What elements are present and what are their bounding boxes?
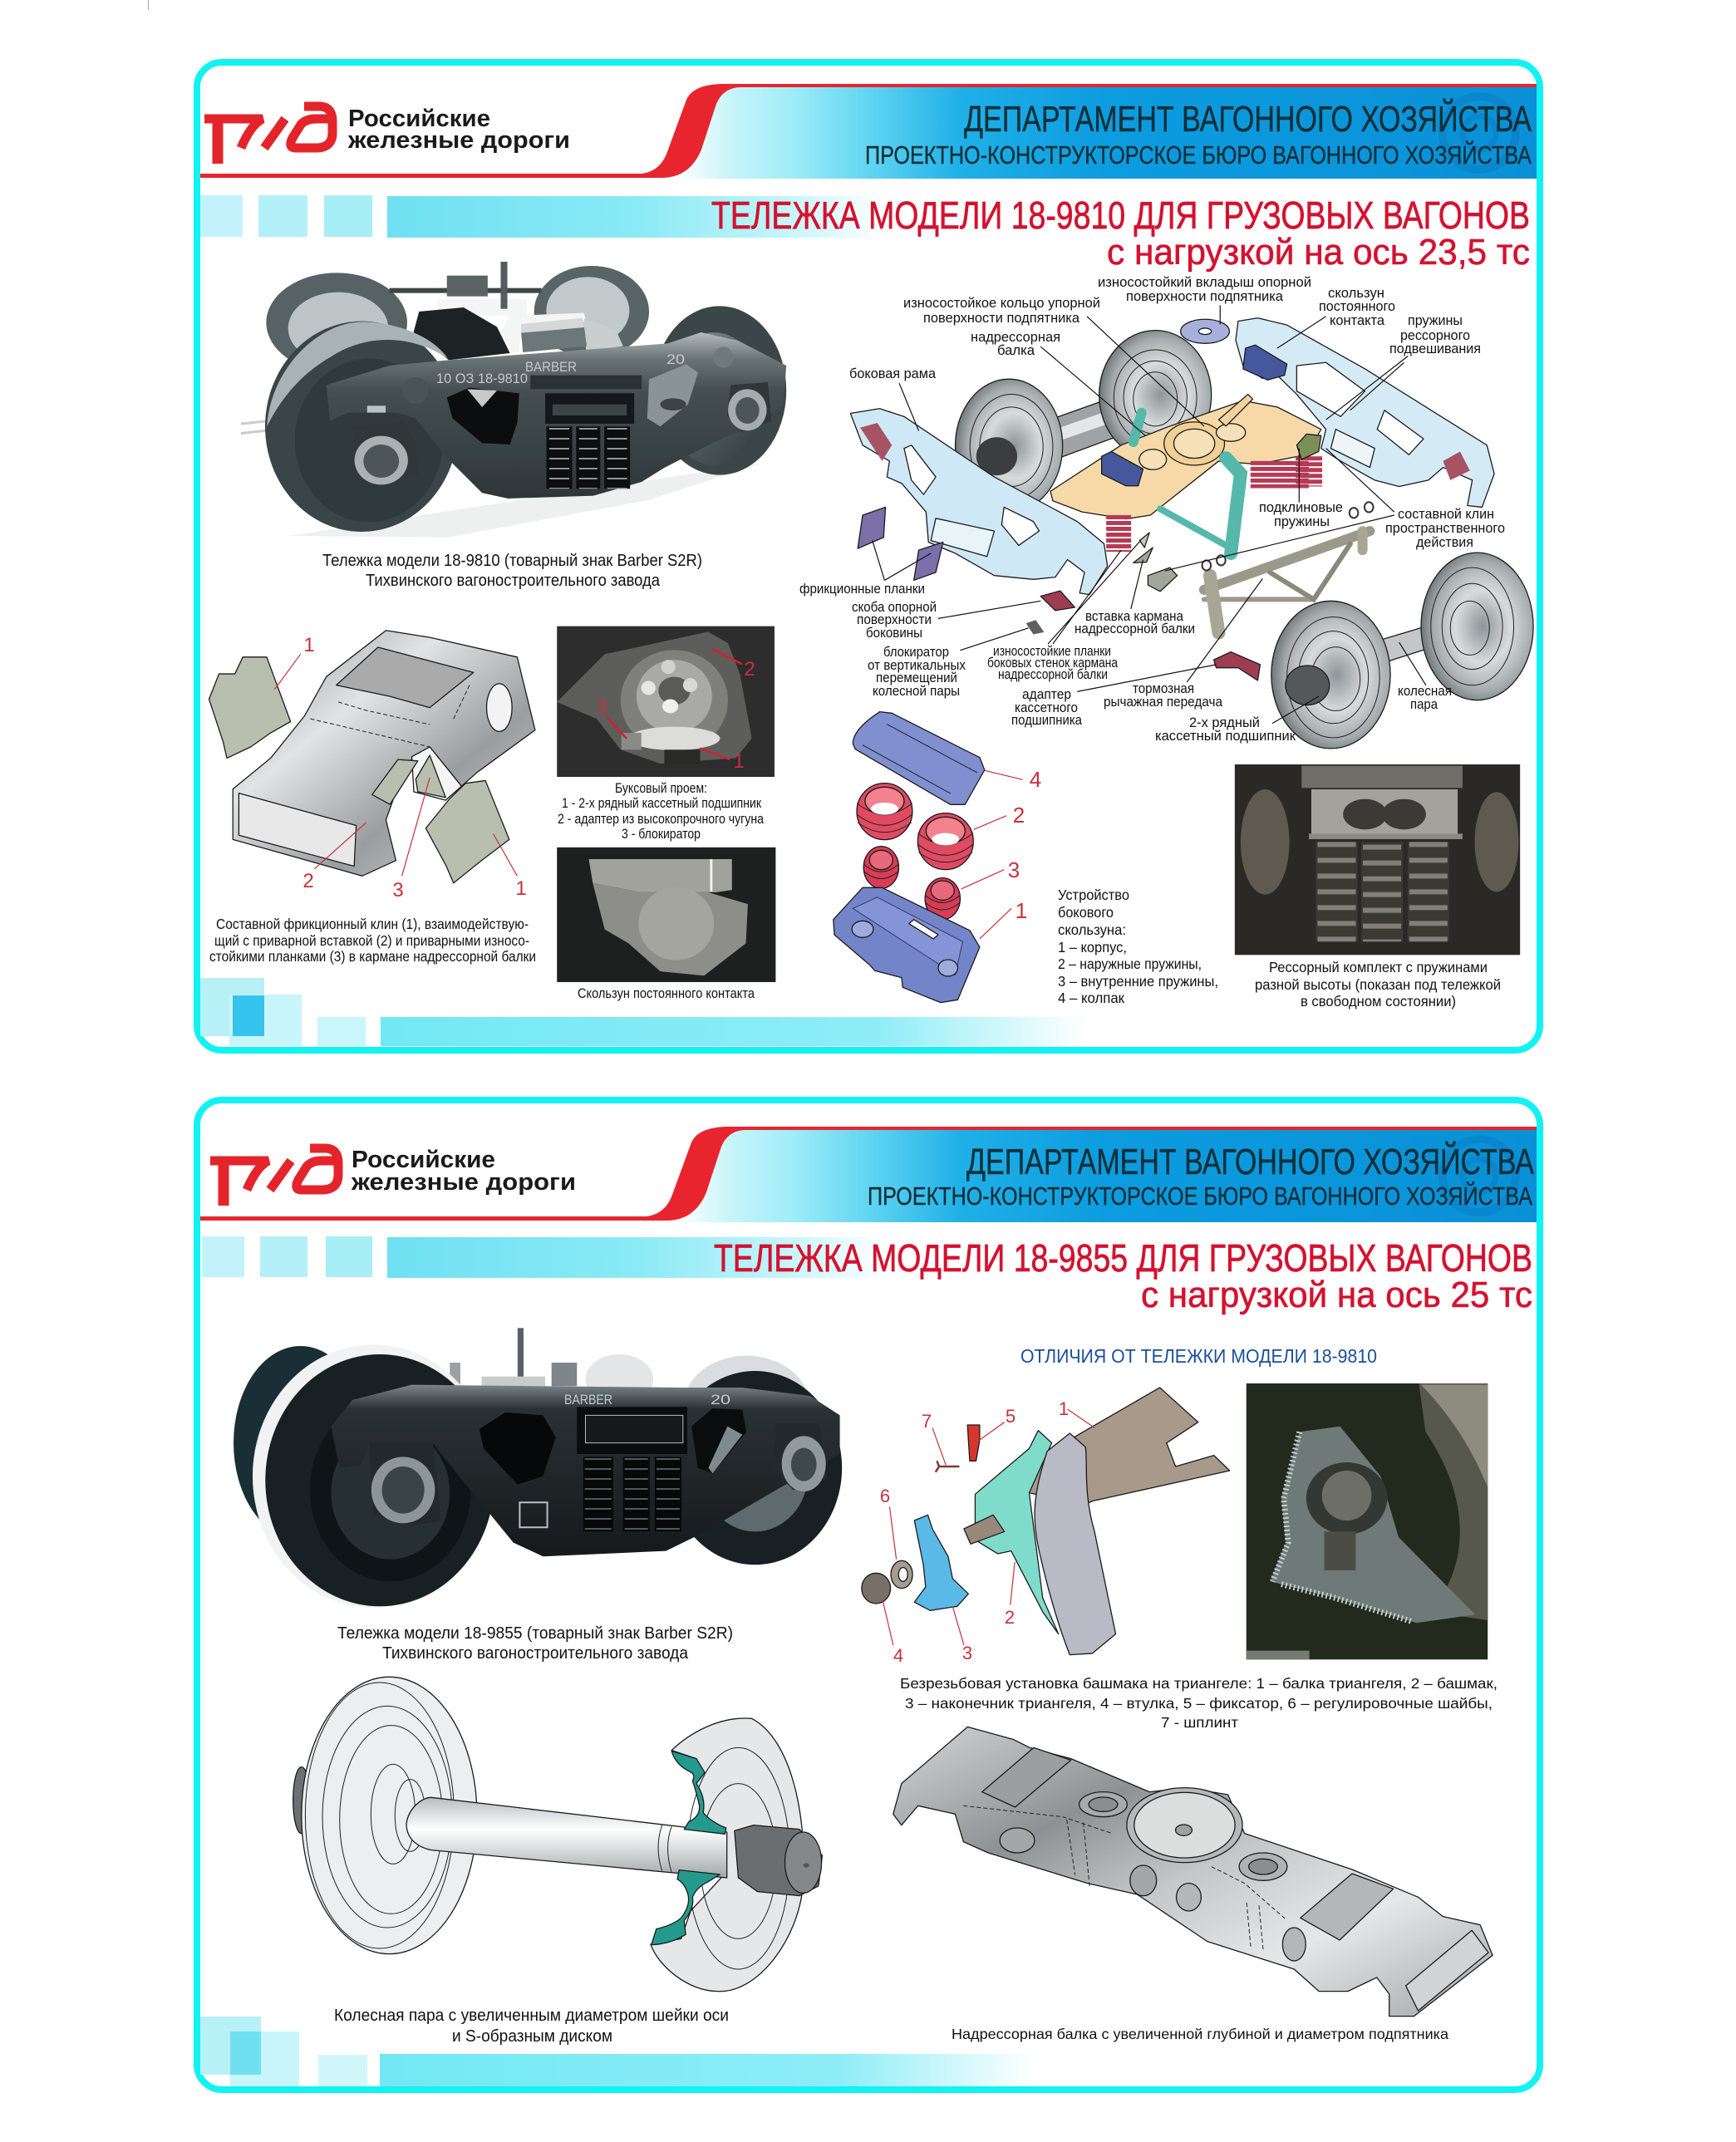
numbers on axle box photo: 3: [596, 696, 607, 719]
front wheelset: [1271, 553, 1533, 749]
shoe part numbers: 7: [922, 1411, 932, 1432]
exploded diagram labels: поверхности: [857, 612, 932, 627]
caption: side bearing parts: 2 – наружные пружины,: [1058, 956, 1202, 972]
exploded diagram labels: контакта: [1330, 313, 1385, 328]
cap: [853, 712, 985, 804]
outer spring left: [857, 784, 912, 840]
exploded diagram labels: тормозная: [1133, 681, 1194, 696]
title second line: с нагрузкой на ось 23,5 тс: [1107, 232, 1530, 273]
photo: axle box opening: [557, 626, 775, 777]
red leaders: [883, 1409, 1094, 1645]
photo: spring set: [1235, 764, 1520, 955]
leader lines: [873, 305, 1426, 724]
exploded diagram labels: надрессорной балки: [998, 667, 1108, 682]
caption: side bearing parts: 4 – колпак: [1058, 990, 1124, 1006]
side bearing numbers: 1: [1016, 898, 1027, 923]
exploded diagram labels: подклиновые: [1259, 500, 1343, 515]
caption: friction wedge: щий с приварной вставкой (2) и приварными износо-: [214, 932, 529, 949]
seams: [311, 685, 470, 747]
photo: bogie 18-9855: [234, 1328, 842, 1608]
RZD logo mark: [210, 1148, 338, 1206]
caption: axle box opening: 2 - адаптер из высокопрочного чугуна: [558, 812, 765, 827]
exploded diagram labels: балка: [997, 343, 1035, 358]
header banner blue band: [677, 1128, 1537, 1222]
caption: side bearing parts: бокового: [1058, 904, 1114, 921]
outer spring right: [917, 813, 973, 870]
exploded diagram labels: износостойкое кольцо упорной: [903, 296, 1100, 311]
logo wordmark: железные дороги: [351, 1169, 576, 1196]
white area left of swoosh: [200, 83, 726, 174]
washer: [891, 1560, 912, 1589]
bolster end: [233, 631, 535, 876]
caption: axle box opening: 3 - блокиратор: [622, 827, 701, 842]
photo: bogie 18-9810: [241, 262, 786, 538]
exploded diagram labels: боковых стенок кармана: [987, 656, 1119, 671]
base body: [834, 887, 980, 1003]
exploded diagram labels: адаптер: [1022, 687, 1071, 702]
caption: bogie 18-9810: [322, 552, 702, 590]
stencil text on bogie: [436, 351, 685, 386]
stencil text on bogie: 10 ОЗ 18-9810: [436, 371, 528, 386]
caption: spring set: разной высоты (показан под тележкой: [1255, 976, 1501, 993]
exploded diagram labels: пара: [1410, 697, 1438, 712]
logo wordmark: железные дороги: [347, 127, 570, 154]
lightening holes: [1000, 1828, 1306, 1961]
exploded diagram labels: поверхности подпятника: [923, 311, 1080, 326]
caption: side bearing parts: Устройство: [1058, 887, 1129, 903]
panel: bogie model 18-9810: [197, 62, 1540, 1050]
stencil text on bogie: 20: [711, 1392, 730, 1408]
exploded diagram labels: кассетного: [1015, 700, 1078, 715]
exploded diagram labels: от вертикальных: [868, 658, 966, 673]
friction plates: [858, 507, 943, 580]
shoe part numbers: 5: [1006, 1406, 1016, 1427]
exploded diagram labels: рессорного: [1400, 328, 1470, 343]
title second line: с нагрузкой на ось 25 тс: [1141, 1275, 1532, 1315]
exploded bogie diagram: [850, 305, 1533, 749]
end opening: [1406, 1930, 1488, 2011]
caption: bogie 18-9810: Тележка модели 18-9810 (товарный знак Barber S2R): [322, 552, 702, 570]
caption: wheelset: и S-образным диском: [452, 2027, 612, 2046]
window: [487, 684, 512, 731]
bosses: [1079, 1792, 1287, 1880]
stencil text on bogie: [564, 1392, 730, 1408]
exploded diagram labels: надрессорная: [971, 330, 1060, 345]
differences heading: ОТЛИЧИЯ ОТ ТЕЛЕЖКИ МОДЕЛИ 18-9810: [1020, 1345, 1377, 1367]
panel: bogie model 18-9855: [197, 1100, 1540, 2090]
logo wordmark: [347, 106, 570, 154]
opening: [239, 793, 357, 866]
exploded diagram labels: скользун: [1328, 286, 1384, 301]
exploded diagram labels: боковины: [866, 626, 922, 641]
panel frame: [197, 62, 1540, 1050]
numbers on wedge drawing: 3: [392, 879, 404, 902]
triangle beam: [993, 1388, 1230, 1506]
title: ТЕЛЕЖКА МОДЕЛИ 18-9810 ДЛЯ ГРУЗОВЫХ ВАГОНОВ: [711, 194, 1530, 237]
title band squares: [202, 1236, 886, 1278]
header red swoosh: [200, 84, 1537, 178]
caption: wheelset: [334, 2007, 729, 2046]
left side frame: [850, 409, 1108, 595]
bearing cap: [735, 1825, 822, 1896]
right wheel, sectioned: [651, 1718, 804, 1992]
blue side bearings: [1102, 345, 1287, 486]
caption: bogie 18-9810: Тихвинского вагоностроительного завода: [366, 572, 661, 590]
bottom decoration: [200, 978, 1087, 1046]
rear wheelset: [956, 331, 1212, 513]
exploded diagram labels: рычажная передача: [1104, 695, 1223, 710]
exploded diagram labels: блокиратор: [883, 645, 949, 660]
logo wordmark: Российские: [352, 1147, 495, 1173]
side bearing numbers: 4: [1030, 767, 1041, 792]
caption: friction wedge: стойкими планками (3) в кармане надрессорной балки: [209, 948, 536, 965]
bottom decoration: [200, 2017, 1036, 2086]
department heading: ДЕПАРТАМЕНТ ВАГОННОГО ХОЗЯЙСТВА: [964, 97, 1532, 140]
left frame detail: [860, 423, 1039, 557]
exploded diagram labels: 2-х рядный: [1189, 715, 1260, 730]
caption: bogie 18-9855: Тихвинского вагоностроительного завода: [382, 1644, 689, 1663]
red leaders: [274, 654, 517, 876]
title band squares: [200, 195, 886, 238]
RZD logo mark: [204, 106, 332, 164]
exploded diagram labels: надрессорной балки: [1075, 621, 1195, 636]
side bearing numbers: 2: [1013, 803, 1025, 828]
friction wedge right: [425, 780, 509, 883]
caption: side bearing parts: скользуна:: [1058, 921, 1126, 938]
pocket: [412, 747, 461, 800]
exploded diagram labels: вставка кармана: [1085, 609, 1184, 624]
teal profile sections: [652, 1751, 726, 1945]
caption: side bearing parts: [1058, 887, 1218, 1006]
exploded diagram labels: износостойкий вкладыш опорной: [1098, 275, 1311, 290]
bureau subheading: ПРОЕКТНО-КОНСТРУКТОРСКОЕ БЮРО ВАГОННОГО ХОЗЯЙСТВА: [865, 140, 1532, 169]
bolster body: [893, 1727, 1493, 2017]
wear ring disc: [1181, 319, 1229, 343]
caption: friction wedge: [209, 916, 536, 965]
drawing: friction wedge in bolster pocket: [209, 631, 535, 883]
bolster: [1050, 395, 1321, 519]
caption: shoe mount: 3 – наконечник триангеля, 4 – втулка, 5 – фиксатор, 6 – регулировочные шайбы,: [905, 1695, 1493, 1712]
caption: shoe mount: Безрезьбовая установка башмака на триангеле: 1 – балка триангеля, 2 – башмак,: [900, 1675, 1497, 1692]
right side frame: [1236, 318, 1494, 507]
drawing: wheelset with S-shaped disc: [293, 1677, 822, 1992]
stencil text on bogie: BARBER: [564, 1392, 612, 1408]
exploded diagram labels: скоба опорной: [852, 600, 937, 615]
numbers on wedge drawing: 1: [515, 877, 527, 900]
green wedges: [1296, 434, 1321, 459]
brake rigging: [1202, 502, 1374, 633]
shoe part numbers: [880, 1398, 1069, 1666]
retainer pin: [967, 1425, 980, 1461]
numbers on axle box photo: 2: [744, 658, 755, 680]
spring plates: [982, 1747, 1394, 1940]
axle ring: [658, 1825, 671, 1872]
drawing: brake shoe mount: [862, 1388, 1230, 1655]
caption: wheelset: Колесная пара с увеличенным диаметром шейки оси: [334, 2007, 729, 2025]
triangle tip: [914, 1515, 968, 1610]
header banner blue band: [677, 86, 1537, 179]
left wheel: [302, 1677, 477, 1954]
caption: spring set: [1255, 959, 1501, 1010]
banner gear watermark: [1443, 96, 1516, 169]
axle end: [964, 1515, 1005, 1544]
caption: side bearing parts: 1 – корпус,: [1058, 939, 1127, 956]
logo wordmark: [351, 1147, 576, 1196]
scan tick mark: [148, 0, 149, 10]
shoe part numbers: 4: [893, 1645, 903, 1666]
shoe part numbers: 3: [962, 1643, 972, 1663]
numbers on wedge drawing: [302, 634, 527, 902]
caption: axle box opening: Буксовый проем:: [615, 781, 707, 796]
teal brake arms: [1134, 413, 1241, 553]
title: ТЕЛЕЖКА МОДЕЛИ 18-9855 ДЛЯ ГРУЗОВЫХ ВАГОНОВ: [714, 1236, 1532, 1280]
exploded diagram labels: постоянного: [1319, 299, 1395, 314]
red leaders: [961, 770, 1023, 939]
right frame detail: [1296, 362, 1470, 480]
caption: bolster: Надрессорная балка с увеличенной глубиной и диаметром подпятника: [952, 2026, 1448, 2042]
small parts: [1026, 533, 1260, 680]
caption: axle box opening: 1 - 2-х рядный кассетный подшипник: [562, 796, 762, 811]
exploded diagram labels: износостойкие планки: [993, 644, 1111, 659]
right wheel rings: [686, 1747, 789, 1969]
exploded diagram labels: подвешивания: [1389, 341, 1481, 356]
drawing: side bearing exploded: [834, 712, 1023, 1003]
panel frame: [197, 1100, 1540, 2090]
center plate: [1127, 1788, 1242, 1863]
exploded diagram labels: перемещений: [876, 671, 957, 685]
caption: spring set: в свободном состоянии): [1301, 993, 1456, 1010]
exploded diagram labels: колесная: [1398, 684, 1452, 699]
exploded diagram labels: действия: [1416, 535, 1473, 550]
cotter pin: [936, 1461, 959, 1472]
logo wordmark: Российские: [348, 106, 490, 132]
caption: axle box opening: [558, 781, 765, 842]
bushing: [862, 1573, 891, 1604]
shoe part numbers: 1: [1059, 1398, 1069, 1419]
exploded diagram labels: подшипника: [1011, 713, 1083, 728]
caption: bogie 18-9855: [337, 1624, 733, 1663]
stencil text on bogie: BARBER: [525, 359, 577, 375]
axle: [406, 1797, 727, 1878]
numbers on wedge drawing: 2: [302, 870, 314, 892]
exploded diagram labels: колесной пары: [873, 684, 960, 699]
inner spring right: [925, 878, 960, 920]
exploded diagram labels: боковая рама: [849, 366, 937, 381]
cap groove: [863, 725, 977, 793]
caption: bogie 18-9855: Тележка модели 18-9855 (товарный знак Barber S2R): [337, 1624, 733, 1643]
friction wedge left: [209, 657, 291, 758]
shoe part numbers: 2: [1005, 1607, 1015, 1628]
stencil text on bogie: 20: [666, 351, 685, 367]
department heading: ДЕПАРТАМЕНТ ВАГОННОГО ХОЗЯЙСТВА: [966, 1140, 1535, 1182]
side bearing numbers: [1008, 767, 1041, 923]
exploded diagram labels: пространственного: [1385, 521, 1505, 536]
top plate: [337, 647, 474, 708]
banner gear watermark: [1443, 1139, 1516, 1212]
photo: shoe mount: [1247, 1383, 1488, 1659]
exploded diagram labels: фрикционные планки: [799, 582, 925, 597]
header red swoosh: [200, 1127, 1537, 1221]
caption: shoe mount: [900, 1675, 1497, 1731]
side bearing numbers: 3: [1008, 857, 1020, 882]
photo: constant contact side bearing: [557, 847, 775, 982]
exploded diagram labels: кассетный подшипник: [1155, 729, 1296, 744]
white area left of swoosh: [200, 1126, 731, 1216]
red springs: [1119, 456, 1309, 552]
caption: shoe mount: 7 - шплинт: [1161, 1714, 1238, 1731]
base detail: [852, 897, 962, 976]
exploded diagram labels: пружины: [1408, 313, 1463, 328]
numbers on wedge drawing: 1: [303, 634, 315, 656]
shoe part numbers: 6: [880, 1486, 890, 1506]
inner spring left: [863, 847, 898, 888]
numbers on axle box photo: 1: [733, 750, 745, 773]
caption: spring set: Рессорный комплект с пружинами: [1269, 959, 1488, 975]
numbers on axle box photo: [596, 658, 755, 773]
far hub: [293, 1767, 310, 1834]
exploded diagram labels: пружины: [1274, 514, 1330, 529]
drawing: bolster with deeper center plate: [893, 1727, 1493, 2017]
shoe: [1035, 1433, 1116, 1655]
insert and plates: [372, 755, 445, 804]
exploded diagram labels: поверхности подпятника: [1126, 289, 1284, 304]
caption: side bearing parts: 3 – внутренние пружины,: [1058, 973, 1218, 990]
brake head: [975, 1431, 1059, 1634]
exploded diagram labels: составной клин: [1398, 507, 1494, 522]
exploded diagram labels: [799, 275, 1505, 744]
caption: friction wedge: Составной фрикционный клин (1), взаимодействую-: [216, 916, 529, 932]
bureau subheading: ПРОЕКТНО-КОНСТРУКТОРСКОЕ БЮРО ВАГОННОГО ХОЗЯЙСТВА: [868, 1181, 1532, 1211]
caption: side bearing photo: Скользун постоянного контакта: [578, 986, 755, 1001]
weld seams: [963, 1805, 1286, 1950]
